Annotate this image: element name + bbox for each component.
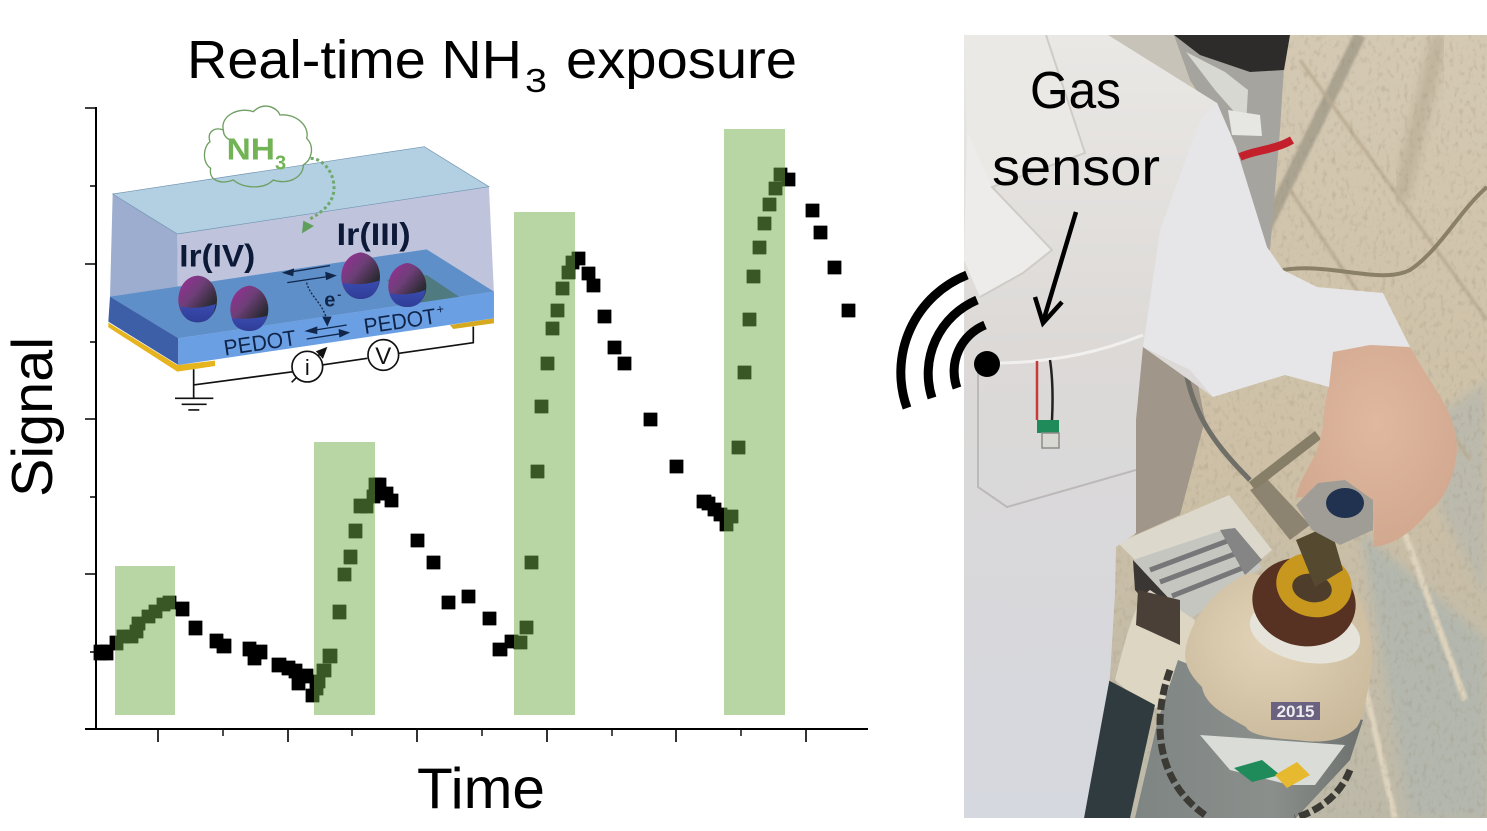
- title: 3: [525, 62, 547, 99]
- label: gas sensor: sensor: [992, 139, 1160, 197]
- valve: [1250, 435, 1343, 587]
- photo of lab worker with gas cylinder: [964, 35, 1487, 818]
- NH3 label: [227, 132, 286, 174]
- circuit: V: [375, 343, 391, 370]
- collar: [964, 35, 1085, 297]
- date label and hazard stickers: [1200, 702, 1345, 788]
- arrow to sensor: [1035, 212, 1076, 323]
- chart axes and ticks: [85, 107, 868, 742]
- arm and hand: [1296, 341, 1457, 547]
- cloud: [204, 106, 311, 187]
- main cylinder body: [1135, 660, 1363, 818]
- PEDOT labels: +: [436, 302, 445, 317]
- sleeve: [1143, 103, 1410, 397]
- pocket: [978, 335, 1143, 507]
- NH3 label: NH: [227, 132, 275, 166]
- particles: [178, 252, 426, 331]
- date label and hazard stickers: 2015: [1277, 702, 1314, 721]
- chain: [1160, 670, 1350, 818]
- PEDOT labels: PEDOT: [362, 303, 438, 339]
- wall: [1084, 35, 1487, 818]
- title: Real-time NH: [187, 30, 522, 90]
- lab coat body: [964, 35, 1236, 818]
- electron transfer arrows: [284, 266, 348, 339]
- e- label: -: [337, 287, 341, 301]
- door frame behind coat: [1135, 347, 1205, 535]
- book and papers: [1120, 495, 1272, 618]
- knob: [1296, 480, 1373, 545]
- dotted arrow: [302, 158, 334, 233]
- exposure windows: [115, 129, 785, 715]
- inset device schematic: [108, 106, 494, 410]
- label: gas sensor: [992, 62, 1160, 197]
- circuit: i: [305, 355, 310, 380]
- Ir labels: Ir(IV): [179, 239, 255, 274]
- gas box: [110, 147, 494, 338]
- icon: wireless signal: [901, 275, 1000, 408]
- data points: [94, 168, 855, 702]
- circuit: [175, 327, 473, 410]
- cylinder collar: [1250, 554, 1360, 664]
- Ir labels: Ir(III): [337, 217, 411, 252]
- Ir labels: [179, 217, 411, 274]
- PEDOT labels: PEDOT: [222, 325, 298, 361]
- x axis label: Time: [417, 757, 545, 821]
- e- label: e: [324, 290, 335, 312]
- title: [187, 30, 797, 99]
- NH3 label: 3: [275, 152, 286, 174]
- e- label: [324, 287, 341, 312]
- sensor on pocket: [1037, 360, 1059, 448]
- y axis label: Signal: [1, 337, 65, 497]
- title: exposure: [566, 30, 797, 90]
- back cylinder: [1108, 35, 1292, 250]
- label: gas sensor: Gas: [1030, 62, 1121, 120]
- PEDOT layer: [108, 249, 494, 372]
- cylinder dome: [1185, 573, 1372, 742]
- second cylinder: [1084, 590, 1195, 818]
- cylinder valve tubing: [1186, 372, 1250, 480]
- PEDOT labels: [222, 302, 445, 361]
